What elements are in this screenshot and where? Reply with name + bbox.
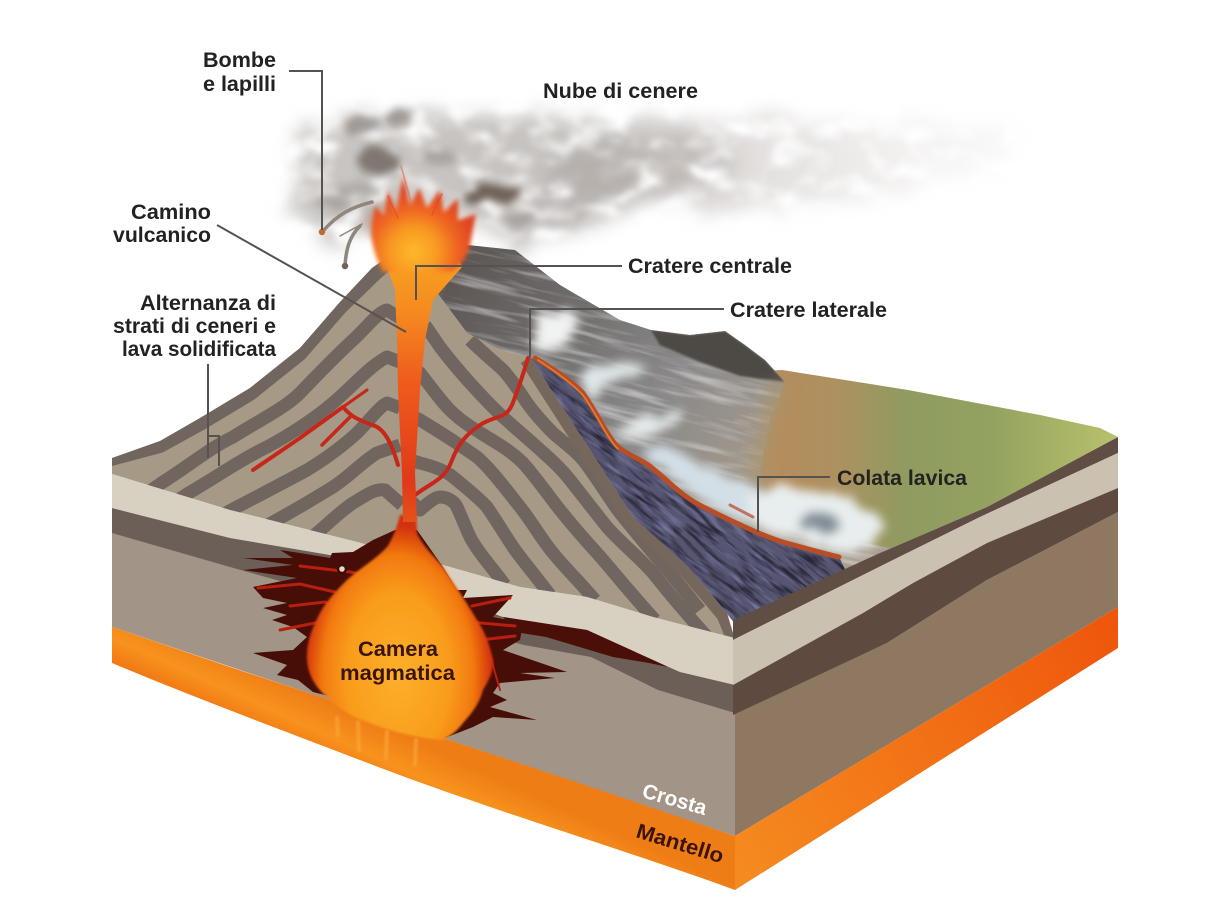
label: Camino vulcanico: vulcanico <box>113 224 211 247</box>
label: Bombe e lapilli <box>203 49 276 96</box>
label: Camera magmatica: Camera <box>358 638 438 661</box>
label: Mantello: Mantello <box>634 820 726 868</box>
volcano flank surface <box>438 245 890 622</box>
label: Alternanza di strati: lava solidificata <box>122 338 276 361</box>
ash cloud <box>270 90 1070 270</box>
label: Cratere laterale: Cratere laterale <box>730 299 887 322</box>
label: Camino vulcanico <box>113 201 211 247</box>
label: Alternanza di strati: strati di ceneri e <box>113 315 276 338</box>
soft edge between flank and plain <box>758 385 780 520</box>
label: Camino vulcanico: Camino <box>131 201 211 224</box>
steam <box>535 310 884 552</box>
volcanic conduit <box>385 240 462 522</box>
lava field <box>530 357 845 621</box>
layered strata <box>100 252 740 645</box>
dark magma pool under the layers <box>503 617 668 667</box>
label: Colata lavica: Colata lavica <box>837 467 967 490</box>
label: Nube di cenere: Nube di cenere <box>543 80 698 103</box>
label: Bombe e lapilli: Bombe <box>203 49 276 72</box>
magma tendrils <box>243 530 567 738</box>
label: Cratere centrale: Cratere centrale <box>628 255 792 278</box>
lava flow stream <box>535 358 839 557</box>
ground layers: right face <box>733 437 1118 890</box>
leader lines <box>208 71 830 532</box>
bombs and lapilli <box>320 202 372 268</box>
cross-section of the volcano <box>100 252 740 645</box>
dike branches <box>253 358 528 495</box>
plain: green ground <box>740 370 1118 553</box>
ground layers: left face <box>112 474 735 890</box>
label: Crosta: Crosta <box>640 780 710 820</box>
label: Camera magmatica <box>340 638 455 685</box>
magma chamber <box>307 515 493 740</box>
label: Camera magmatica: magmatica <box>340 662 455 685</box>
label: Bombe e lapilli: e lapilli <box>203 73 276 96</box>
label: Alternanza di strati <box>113 292 276 361</box>
label: Alternanza di strati: Alternanza di <box>140 292 276 315</box>
eruption fountain <box>363 166 476 272</box>
mantle plume bumps <box>337 718 416 765</box>
red magma veins <box>258 565 515 690</box>
